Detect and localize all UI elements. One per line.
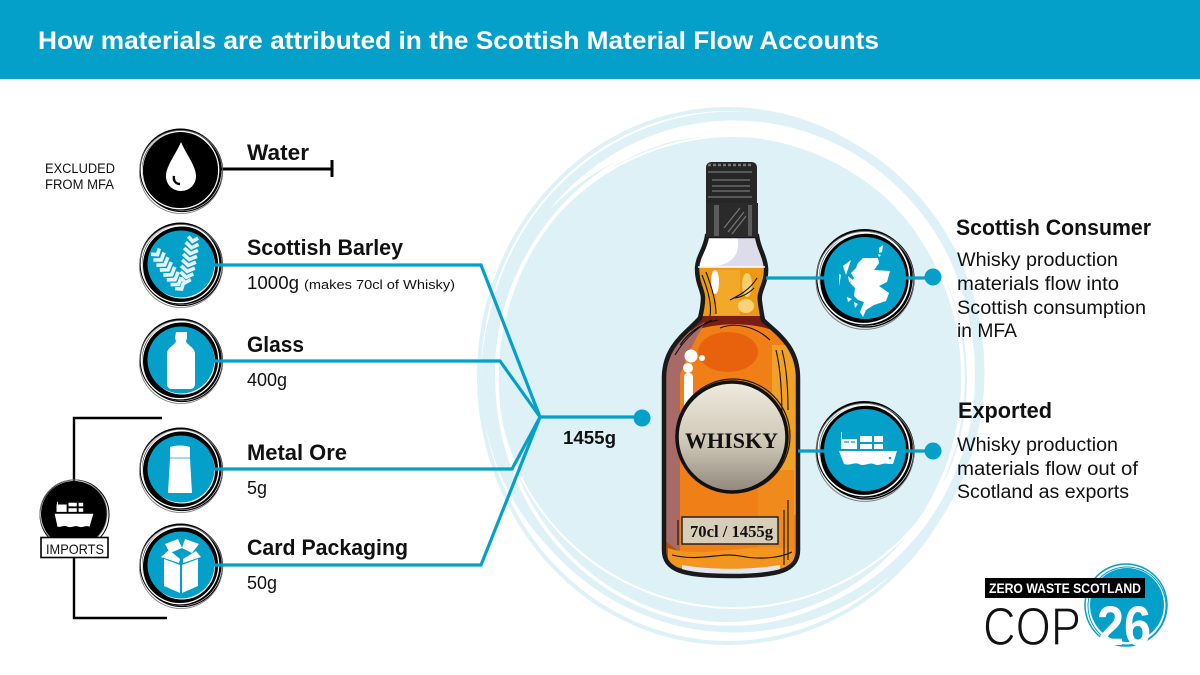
Exported text block bbox=[957, 398, 1139, 503]
logo: Zero Waste Scotland COP26 bbox=[983, 564, 1167, 657]
export connector dot bbox=[924, 442, 942, 460]
title: How materials are attributed in the Scottish Material Flow Accounts bbox=[38, 27, 879, 55]
metal ore value: 5g bbox=[247, 478, 267, 498]
round whisky label: WHISKY bbox=[685, 428, 778, 453]
volume and weight label bbox=[682, 517, 778, 544]
barley heading: Scottish Barley bbox=[247, 235, 404, 260]
barley value: (makes 70cl of Whisky) bbox=[304, 277, 455, 292]
icon: water drop bbox=[140, 130, 222, 214]
consumer connector dot bbox=[924, 268, 942, 286]
Scottish Consumer text block: Scottish Consumer bbox=[956, 215, 1151, 240]
card packaging value: 50g bbox=[247, 573, 277, 593]
excluded label: FROM MFA bbox=[45, 177, 114, 192]
background circle behind the bottle bbox=[479, 109, 980, 643]
icon: card box bbox=[140, 524, 222, 608]
Scottish Consumer text block: Whisky production bbox=[957, 250, 1118, 271]
Exported text block: Scotland as exports bbox=[957, 482, 1129, 503]
volume and weight label: 70cl / 1455g bbox=[690, 522, 774, 541]
icon: glass bottle bbox=[140, 320, 222, 404]
icon: Scotland map bbox=[816, 230, 914, 329]
glass heading: Glass bbox=[247, 332, 304, 357]
Scottish Consumer text block: in MFA bbox=[957, 321, 1017, 342]
round whisky label bbox=[676, 379, 790, 493]
bottle cap bbox=[706, 162, 757, 203]
icon: imports ship with label bbox=[40, 480, 109, 558]
icon: metal ore bbox=[140, 428, 222, 512]
output connector lines bbox=[766, 278, 933, 451]
Exported text block: Exported bbox=[958, 398, 1052, 423]
Scottish Consumer text block: materials flow into bbox=[957, 274, 1119, 295]
bottle foil neck bbox=[706, 203, 758, 237]
barley value: 1000g bbox=[247, 273, 299, 293]
bottle glass and liquid bbox=[666, 238, 796, 574]
total weight label: 1455g bbox=[563, 428, 616, 448]
whisky bottle bbox=[660, 162, 805, 580]
input connector lines bbox=[214, 265, 642, 565]
Exported text block: Whisky production bbox=[957, 435, 1118, 456]
excluded label bbox=[45, 161, 115, 192]
Scottish Consumer text block: Scottish consumption bbox=[957, 298, 1146, 319]
metal ore heading: Metal Ore bbox=[247, 440, 347, 465]
excluded label: EXCLUDED bbox=[45, 161, 115, 176]
logo: Zero Waste Scotland COP26: 26 bbox=[1097, 594, 1151, 657]
water heading: Water bbox=[247, 140, 309, 165]
header banner bbox=[0, 0, 1200, 79]
logo: Zero Waste Scotland COP26: COP bbox=[983, 597, 1081, 657]
imports bracket bbox=[74, 418, 167, 618]
Exported text block: materials flow out of bbox=[957, 459, 1139, 480]
glass value: 400g bbox=[247, 370, 287, 390]
card packaging heading: Card Packaging bbox=[247, 535, 408, 560]
logo: Zero Waste Scotland COP26: ZERO WASTE SCOTLAND bbox=[989, 580, 1141, 596]
barley value bbox=[247, 273, 455, 293]
bottle outline bbox=[664, 236, 798, 576]
imports label: IMPORTS bbox=[46, 541, 104, 557]
icon: export ship bbox=[816, 402, 914, 501]
water line with end stop bbox=[218, 160, 332, 177]
Scottish Consumer text block bbox=[956, 215, 1151, 342]
icon: barley bbox=[140, 224, 222, 308]
total connector dot bbox=[634, 410, 650, 426]
